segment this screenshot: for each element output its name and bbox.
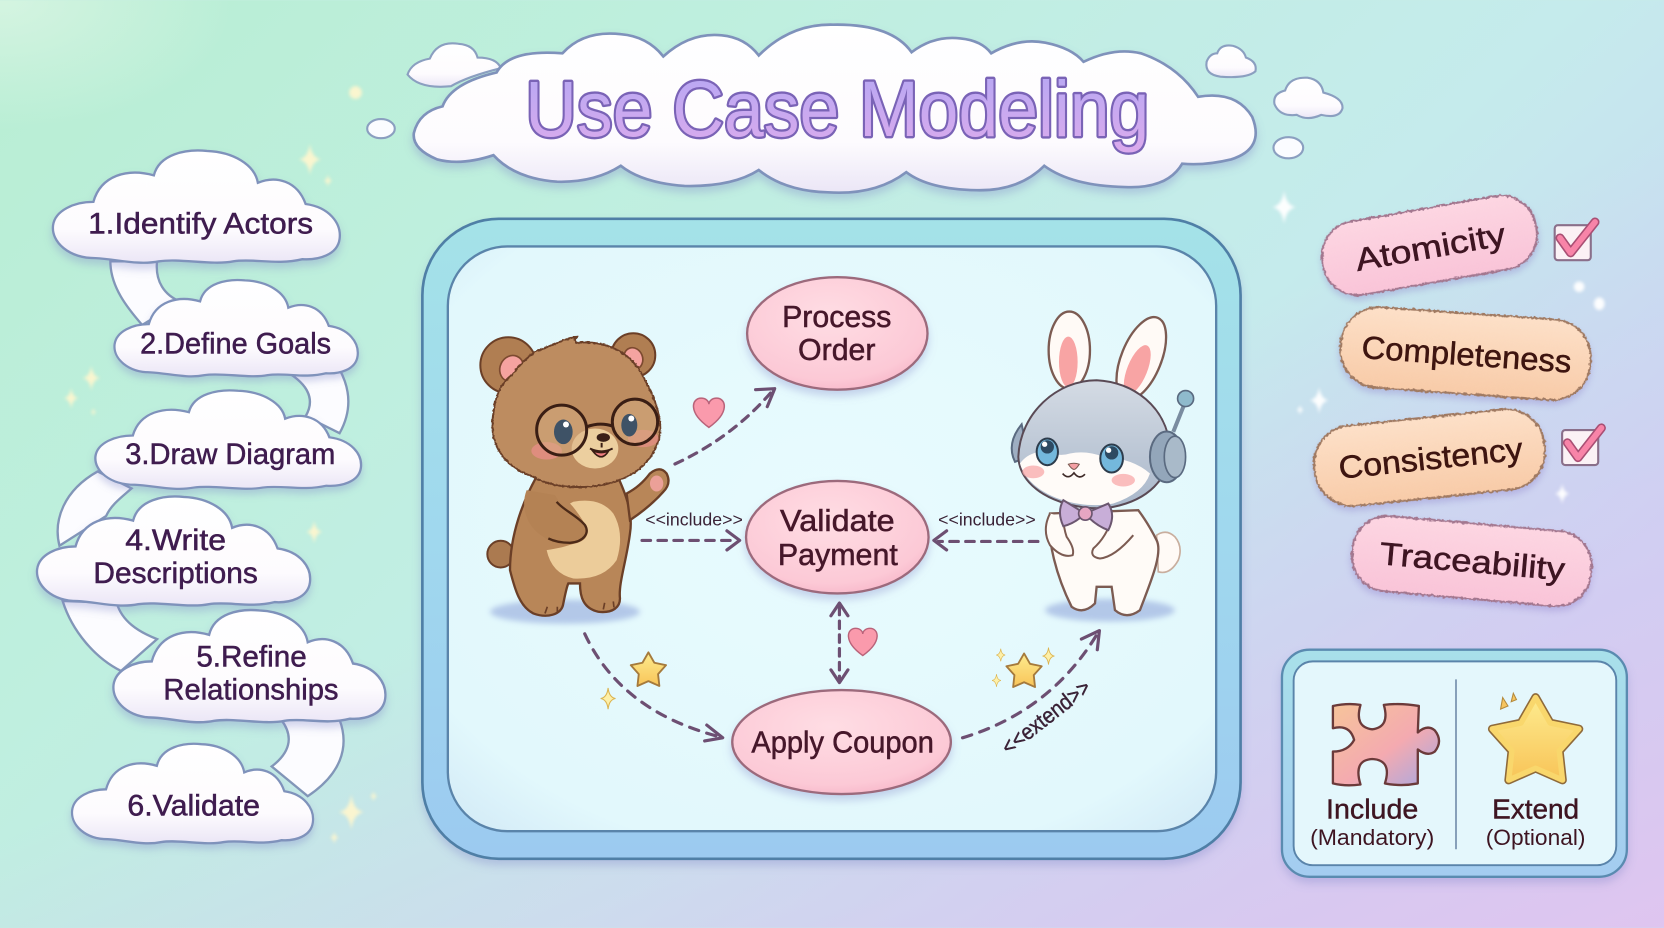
step 4: Write Descriptions: 4.Write	[125, 524, 226, 557]
step 5: Refine Relationships	[113, 610, 385, 722]
pill: Consistency	[1310, 405, 1549, 510]
step 3: Draw Diagram: 3.Draw Diagram	[125, 438, 335, 471]
small oval puff: left	[367, 119, 395, 138]
icon: star left	[631, 652, 666, 686]
title cloud group	[367, 25, 1343, 193]
panel inner area	[448, 246, 1216, 831]
use case: Process Order	[747, 277, 928, 390]
label: Include: (Mandatory)	[1310, 825, 1434, 850]
use case: Validate Payment: Validate	[780, 503, 895, 538]
panel frame	[422, 219, 1241, 859]
small oval puff: right	[1273, 137, 1303, 158]
label: extend: <<extend>>	[996, 675, 1096, 760]
step 5: Refine Relationships: 5.Refine	[196, 641, 307, 674]
actor: bear	[480, 333, 668, 624]
icon: heart near Process Order	[693, 398, 724, 427]
label: Include: Include	[1326, 793, 1418, 824]
panel: use case diagram	[422, 219, 1241, 859]
icon: checkbox 2	[1562, 428, 1601, 465]
pill: Consistency: Consistency	[1337, 431, 1524, 486]
connector ribbons between steps	[58, 261, 348, 796]
arrow: Apply Coupon to bunny	[963, 631, 1099, 738]
small cloud: top left	[408, 43, 501, 87]
step 2: Define Goals: 2.Define Goals	[140, 328, 331, 361]
step 4: Write Descriptions	[37, 496, 310, 606]
small cloud: right	[1274, 78, 1343, 118]
pill: Completeness: Completeness	[1361, 329, 1573, 380]
use case: Validate Payment: Payment	[778, 537, 898, 572]
process steps column	[37, 151, 385, 843]
step 4: Write Descriptions: Descriptions	[93, 557, 258, 590]
icon: puzzle piece	[1333, 704, 1439, 785]
step 6: Validate	[72, 744, 313, 843]
legend frame	[1282, 650, 1627, 877]
step 5: Refine Relationships: Relationships	[163, 674, 339, 707]
actor: bunny	[1012, 310, 1194, 621]
label: Extend	[1486, 793, 1585, 850]
step 2: Define Goals	[114, 280, 358, 376]
pill: Traceability: Traceability	[1378, 535, 1567, 587]
label: Include	[1310, 793, 1434, 850]
use case: Process Order: Process	[782, 299, 891, 334]
principles column	[1310, 190, 1601, 609]
step 1: Identify Actors	[53, 151, 340, 263]
pill: Atomicity	[1316, 190, 1543, 301]
arrow: Validate Payment to Apply Coupon	[831, 603, 848, 683]
decorative sparkles	[64, 86, 1605, 844]
icon: sparkle left	[601, 688, 616, 709]
panel: legend	[1282, 650, 1627, 877]
step 6: Validate: 6.Validate	[127, 789, 260, 822]
small cloud: top right	[1206, 45, 1256, 77]
icon: checkbox 1	[1555, 222, 1595, 260]
icon: star right	[992, 648, 1054, 687]
arrow: bear to Validate Payment	[642, 531, 740, 550]
title cloud shape	[414, 25, 1256, 193]
use case: Validate Payment	[746, 481, 929, 593]
label: include right: <<include>>	[938, 510, 1036, 530]
label: Extend: (Optional)	[1486, 825, 1585, 850]
title: Use Case Modeling	[525, 65, 1149, 153]
icon: heart near Validate Payment	[848, 628, 877, 656]
pill: Traceability	[1349, 513, 1595, 609]
step 3: Draw Diagram	[95, 390, 361, 489]
label: Extend: Extend	[1492, 793, 1579, 824]
use case: Apply Coupon: Apply Coupon	[751, 725, 934, 760]
arrow: bunny to Validate Payment	[934, 531, 1038, 550]
legend inner area	[1294, 661, 1616, 865]
arrow: bear to Apply Coupon	[585, 634, 723, 741]
use case: Apply Coupon	[732, 690, 951, 794]
icon: star	[1492, 693, 1579, 780]
pill: Atomicity: Atomicity	[1352, 216, 1508, 278]
use case: Process Order: Order	[798, 332, 876, 367]
arrow: bear to Process Order	[675, 389, 775, 464]
label: include left: <<include>>	[645, 510, 743, 530]
pill: Completeness	[1338, 305, 1593, 403]
step 1: Identify Actors: 1.Identify Actors	[88, 208, 313, 241]
